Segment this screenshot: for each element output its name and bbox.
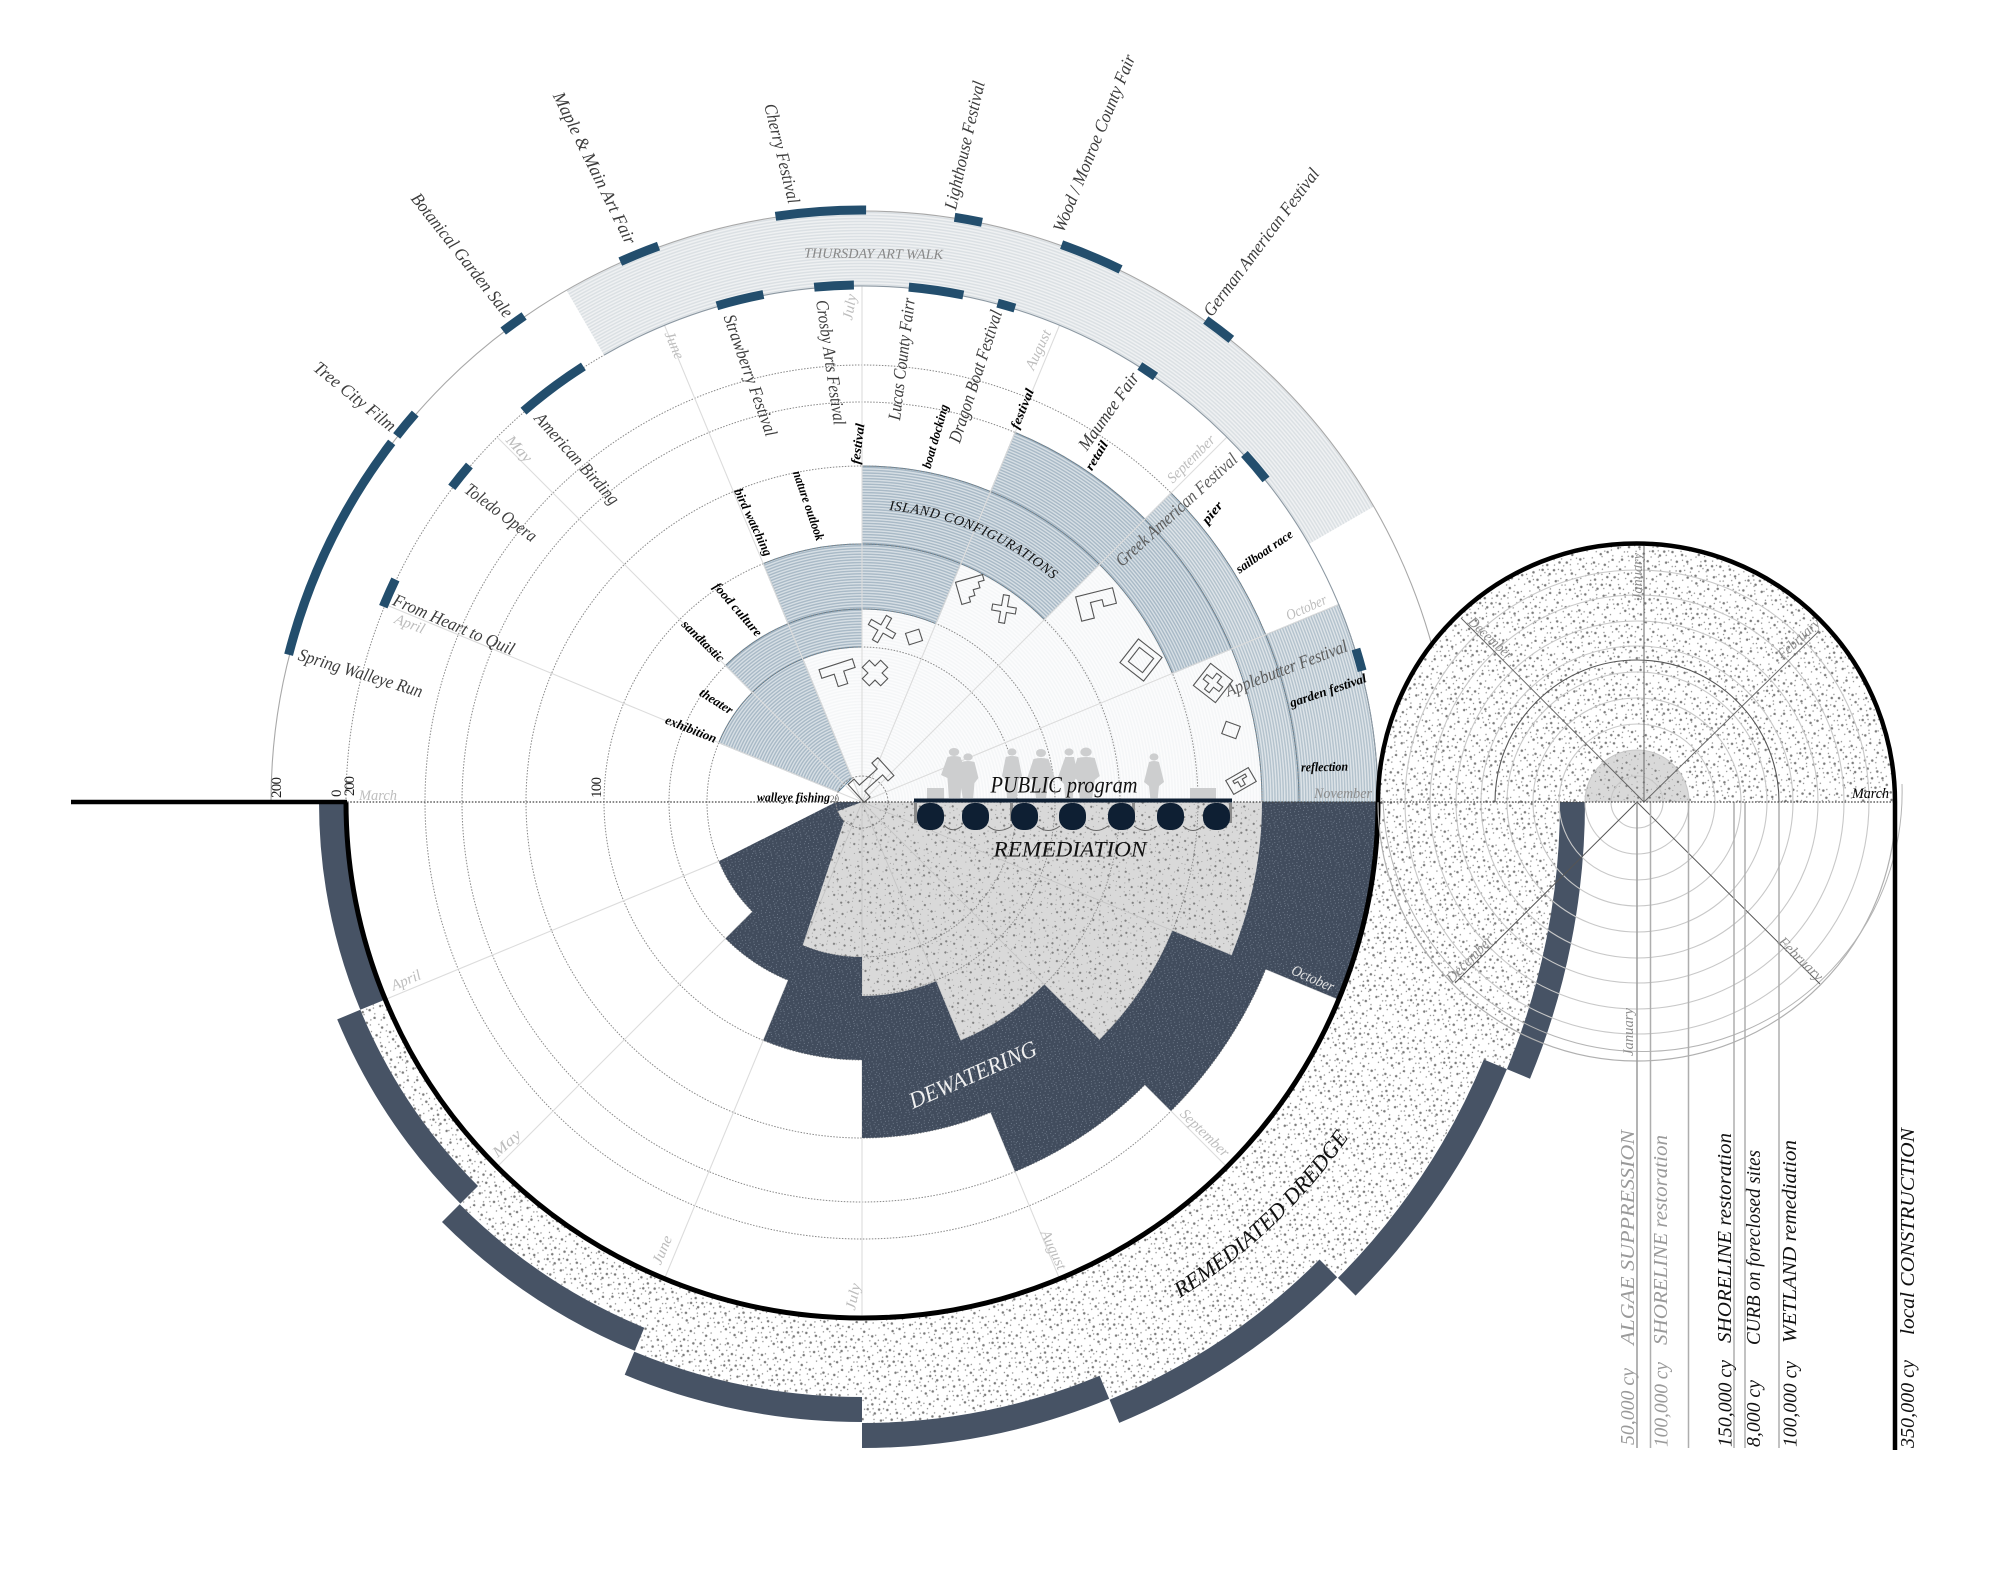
volume labels: ALGAE SUPPRESSION [1617,1128,1639,1347]
volume labels: CURB on foreclosed sites [1743,1150,1765,1345]
festival labels: German American Festival [1199,164,1323,320]
icon: T plan [819,659,859,691]
main spiral diagram [270,206,1893,1448]
heading: PUBLIC program: PUBLIC program [990,772,1138,798]
activity labels: nature outlook [790,469,828,543]
festival labels: Maumee Fair [1073,367,1144,455]
month labels [358,293,1889,1312]
icon: stair plan [956,575,989,604]
activity labels: exhibition [663,712,719,746]
activity labels: theater [697,685,737,718]
month labels: January [1630,553,1646,600]
festival labels: American Birding [530,408,624,509]
month labels: December [1464,614,1516,663]
festival labels: Lighthouse Festival [940,79,989,212]
panel: dewatering stepped area [719,802,1378,1172]
festival labels: Spring Walleye Run [296,644,425,701]
icon: thin cross [990,593,1018,625]
volume labels: SHORELINE restoration [1650,1135,1672,1345]
festival bars on inner ring [383,285,1362,671]
festival labels: Tree City Film [310,357,400,435]
panel: remediation stepped area [803,802,1262,1040]
month labels: June [661,329,687,362]
activity labels: food culture [710,579,766,640]
heading: REMEDIATION: REMEDIATION [992,836,1148,862]
activity labels [663,386,1369,804]
black spiral line [71,544,1895,1450]
icon: square with plus [1193,663,1233,703]
volume labels [1617,1126,1919,1449]
month labels: July [840,293,860,321]
festival labels: Wood / Monroe County Fair [1049,51,1140,235]
month labels: May [489,1127,525,1162]
month labels: October [1284,592,1330,624]
month labels: December [1443,932,1497,987]
activity labels: walleye fishing [757,790,830,804]
volume labels: 50,000 cy [1617,1368,1639,1445]
volume labels: 8,000 cy [1743,1380,1765,1447]
axis scale numbers: 200 [269,777,285,798]
black spiral lower arc [346,802,1378,1318]
festival labels: Botanical Garden Sale [407,189,517,321]
month labels: November [1313,786,1372,802]
icon: keyed plan [1226,768,1256,794]
festival labels: Applebutter Festival [1222,636,1350,701]
volume labels: SHORELINE restoration [1714,1133,1736,1343]
horizontal dotted axis [347,801,1897,803]
festival labels: Toledo Opera [461,479,541,546]
volume labels: 350,000 cy [1897,1360,1919,1449]
icon: small square [905,629,923,645]
festival labels [296,51,1350,701]
volume labels: 100,000 cy [1780,1361,1802,1447]
axis scale numbers [269,776,605,798]
axis scale numbers: 0 [329,790,345,797]
ISLAND CONFIGURATIONS heading: ISLAND CONFIGURATIONS [889,501,1058,578]
month labels: February [1774,934,1826,985]
panel: island configurations pale background [803,564,1262,802]
activity labels: 20 [830,794,840,804]
icon: plus [863,610,901,648]
month labels: September [1164,432,1219,487]
month labels: August [1036,1227,1069,1273]
deck with floating pods [914,798,1232,830]
activity labels: retail [1082,437,1111,473]
icon: double diamond [1120,639,1162,681]
festival labels: Crosby Arts Festival [812,299,850,426]
axis scale numbers: 100 [589,777,605,798]
activity labels: sailboat race [1232,526,1296,577]
gray centre half disc [1585,750,1689,802]
activity labels: sandtastic [678,616,728,665]
icon: centre H plan [848,758,894,802]
volume labels: 150,000 cy [1714,1360,1736,1447]
icon: small square east [1222,721,1240,739]
month labels: October [1289,963,1336,996]
festival labels: Greek American Festival [1111,449,1241,570]
activity labels: garden festival [1287,670,1369,710]
activity labels: boat docking [919,402,952,470]
month labels: February [1774,616,1824,664]
activity labels: bird watching [731,486,776,559]
pale island plan icons [819,575,1256,802]
festival labels: Strawberry Festival [720,312,781,439]
icon: chunky cross [857,655,893,691]
vertical volume lines [1637,802,1779,1448]
festival labels: Dragon Boat Festival [944,308,1006,446]
panel: Thursday Art Walk band [566,211,1374,544]
festival labels: Lucas County Fairr [884,296,919,422]
volume labels: 100,000 cy [1650,1362,1672,1447]
month labels: March [358,788,397,804]
panel: hatched public program sectors [719,432,1378,802]
heading: DEWATERING: DEWATERING [904,1036,1041,1114]
month labels: April [391,611,427,638]
people silhouettes [927,748,1216,800]
panel: remediated dredge stipple [360,544,1895,1423]
REMEDIATED DREDGE heading: REMEDIATED DREDGE [1174,1128,1348,1298]
month labels: August [1022,327,1055,373]
activity labels: reflection [1301,759,1348,774]
heading: Thursday Art Walk: THURSDAY ART WALK [804,247,944,263]
panel: stepped dark dredge bars [319,802,1585,1448]
month labels: May [501,432,535,466]
activity labels: pier [1197,497,1227,528]
festival bars on outer ring [289,210,1231,655]
centre dashed circle [836,776,888,828]
small circle rings and radials [1378,546,1902,1061]
month labels: June [650,1233,676,1267]
month labels: July [843,1282,865,1312]
volume labels: WETLAND remediation [1779,1140,1801,1343]
month labels: September [1176,1106,1232,1161]
festival labels: Cherry Festival [760,102,804,205]
activity labels: festival [848,422,867,465]
axis scale numbers: 200 [342,776,358,796]
activity labels: festival [1007,386,1037,431]
month labels: March [1851,786,1889,802]
month labels: April [388,968,424,995]
month labels: January [1621,1008,1637,1056]
volume labels: local CONSTRUCTION [1897,1126,1919,1335]
icon: C plan [1076,588,1119,621]
festival labels: Maple & Main Art Fair [549,88,641,248]
festival labels: From Heart to Quil [389,589,518,659]
